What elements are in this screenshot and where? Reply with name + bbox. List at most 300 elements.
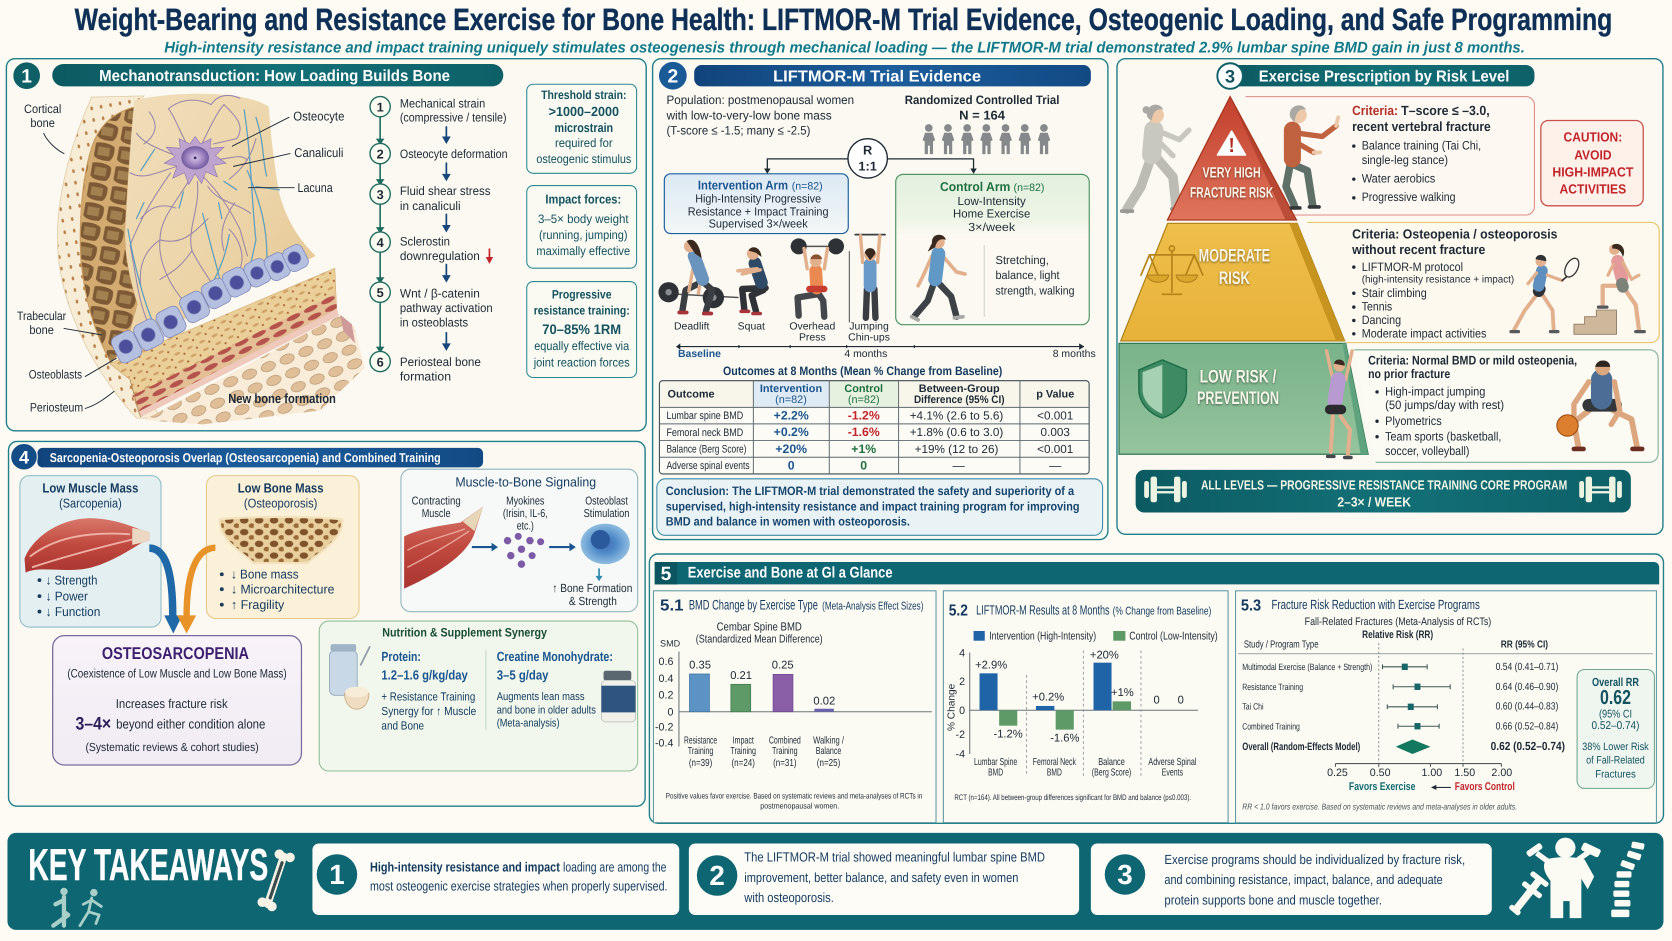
box: low bone mass: ↑ Fragility [231, 597, 284, 612]
chart 5.1: BMD change by exercise type: 0.02 [813, 695, 835, 708]
flow: mechanotransduction steps: Sclerostin [400, 236, 450, 248]
tier: very high risk: VERY HIGH [1203, 163, 1261, 181]
box: nutrition and supplement synergy: (Meta-analysis) [497, 717, 560, 730]
labels: exercises: Overhead [789, 321, 835, 333]
chart 5.2: LIFTMOR-M results: +20% [1090, 649, 1119, 662]
table: outcomes: -1.6% [848, 427, 880, 439]
box: low bone mass: (Osteoporosis) [244, 496, 317, 511]
table: outcomes: -1.2% [848, 410, 880, 423]
box: nutrition and supplement synergy: Protein: [381, 649, 421, 664]
flow: mechanotransduction steps: Fluid shear stress [400, 186, 491, 198]
callout: overall RR: Overall RR [1592, 677, 1639, 689]
table: outcomes: Intervention [760, 383, 822, 395]
box: control arm: strength, walking [996, 285, 1074, 298]
chart 5.3: forest plot: Study / Program Type [1244, 639, 1319, 651]
text: randomized trial: Randomized Controlled Trial [905, 94, 1059, 107]
tier: low risk: LOW RISK / [1200, 367, 1277, 387]
labels: exercises: Squat [738, 321, 765, 333]
flow: mechanotransduction steps: Periosteal bone [400, 356, 481, 369]
card: takeaway 2 [689, 844, 1079, 915]
chart 5.1: BMD change by exercise type: -0.4 [655, 738, 674, 750]
tier: very high risk [1167, 97, 1296, 220]
badge 1: 1 [21, 66, 32, 87]
box: osteosarcopenia: Increases fracture risk [116, 696, 229, 711]
table: outcomes: +1.8% (0.6 to 3.0) [910, 427, 1003, 439]
box: nutrition and supplement synergy: 1.2–1.6 g/kg/day [381, 668, 468, 683]
chart 5.2: LIFTMOR-M results: Balance [1098, 757, 1125, 768]
card: takeaway 3: Exercise programs should be individualized by fracture risk, [1164, 852, 1465, 867]
chart 5.2: LIFTMOR-M results: +2.9% [975, 659, 1007, 672]
chart 5.3: forest plot: Fracture Risk Reduction with Exercise Programs [1271, 597, 1480, 612]
chart 5.1: BMD change by exercise type: 0.4 [659, 673, 674, 685]
icon: spine [1611, 841, 1645, 917]
box: very high criteria: Progressive walking [1362, 191, 1456, 204]
new bone layers [110, 268, 365, 424]
icon: contracting muscle [404, 507, 483, 589]
box: low muscle mass: ↓ Function [46, 604, 100, 619]
chart 5.3: forest plot: 0.64 (0.46–0.90) [1496, 681, 1558, 693]
timeline [676, 343, 1096, 360]
callout: caution: ACTIVITIES [1560, 182, 1626, 197]
box: moderate criteria: Criteria: Osteopenia / osteoporosis [1352, 227, 1558, 242]
chart 5.3: forest plot: 0.60 (0.44–0.83) [1496, 701, 1558, 713]
table: outcomes: +2.2% [774, 410, 809, 423]
arrow: muscle to osteosarcopenia [149, 548, 182, 633]
box: low risk criteria: soccer, volleyball) [1385, 445, 1470, 458]
box: control arm [896, 174, 1089, 325]
flow: mechanotransduction steps: 1 [377, 100, 384, 115]
table: outcomes [659, 365, 1089, 474]
text: population: Population: postmenopausal women [666, 94, 854, 107]
table: outcomes: 0 [860, 460, 867, 473]
banner: all levels: ALL LEVELS — PROGRESSIVE RESISTANCE TRAINING CORE PROGRAM [1201, 478, 1567, 492]
flow: mechanotransduction steps: pathway activation [400, 302, 493, 315]
flow: mechanotransduction steps: 5 [377, 285, 384, 300]
figure: jumping woman [1327, 351, 1352, 457]
panel 4: osteosarcopenia [9, 441, 645, 806]
flow: mechanotransduction steps: 2 [377, 147, 384, 162]
table: outcomes: +20% [775, 443, 807, 456]
chart 5.2: LIFTMOR-M results: Events [1162, 767, 1183, 779]
icon: porous bone [220, 517, 342, 563]
chart 5.3: forest plot: Fall-Related Fractures (Meta-Analysis of RCTs) [1305, 617, 1491, 628]
box: low risk criteria: Criteria: Normal BMD or mild osteopenia, [1368, 353, 1577, 367]
box: very high criteria: single-leg stance) [1362, 154, 1448, 167]
text: population: with low-to-very-low bone mass [665, 110, 832, 123]
figure: deadlift [658, 240, 738, 314]
bone labels: bone [29, 324, 54, 337]
table: outcomes: Balance (Berg Score) [666, 444, 746, 456]
box: control arm: balance, light [996, 269, 1060, 282]
table: outcomes: Femoral neck BMD [666, 427, 743, 439]
callout: caution [1541, 121, 1643, 206]
bone labels: Trabecular [17, 310, 66, 323]
box: osteosarcopenia: (Systematic reviews & cohort studies) [85, 741, 259, 754]
icon: runners [53, 888, 101, 926]
box: nutrition and supplement synergy: + Resistance Training [381, 691, 475, 704]
chart 5.1: BMD change by exercise type: Impact [733, 735, 754, 746]
callout: conclusion: Conclusion: The LIFTMOR-M trial demonstrated the safety and superiority of a [666, 486, 1075, 498]
chart 5.3: forest plot: Tai Chi [1242, 701, 1264, 712]
chart 5.2: LIFTMOR-M results: BMD [988, 767, 1003, 779]
bone labels: Canaliculi [294, 145, 343, 160]
callout: progressive resistance training: 70–85% 1RM [542, 321, 621, 337]
box: moderate criteria: LIFTMOR-M protocol [1362, 261, 1463, 274]
chart 5.1: BMD change by exercise type: 0 [667, 707, 674, 719]
box: muscle-to-bone signaling: Stimulation [584, 508, 629, 520]
figure: overhead press [791, 238, 844, 317]
chart 5.3: forest plot: 1.00 [1421, 768, 1443, 779]
box: control arm: Stretching, [996, 254, 1049, 267]
flow: mechanotransduction steps: in osteoblasts [400, 317, 468, 330]
table: outcomes: 0.003 [1041, 427, 1070, 439]
chart 5.1: BMD change by exercise type: 0.21 [730, 669, 752, 682]
illustration: bone cross-section [44, 94, 365, 424]
chart 5.3: forest plot: Multimodal Exercise (Balance + Strength) [1242, 662, 1372, 672]
banner: all levels [1136, 470, 1631, 513]
banner: all levels: 2–3× / WEEK [1337, 495, 1411, 510]
bars [689, 674, 834, 712]
chart 5.3: forest plot: RR (95% CI) [1501, 639, 1548, 651]
chart 5.1: BMD change by exercise type: Positive values favor exercise. Based on systematic reviews and meta-analyses of RCTs in [666, 791, 922, 801]
bars [980, 663, 1131, 730]
icon: creatine bottle [601, 671, 636, 722]
labels: exercises [674, 321, 890, 344]
labels: exercises: Chin-ups [848, 332, 890, 344]
chart 5.1: BMD change by exercise type: Training [688, 745, 713, 757]
heading: key takeaways: KEY TAKEAWAYS [28, 839, 268, 889]
table: outcomes: — [952, 460, 965, 473]
chart 5.1: BMD change by exercise type: Training [730, 745, 756, 757]
callout: threshold strain: osteogenic stimulus [536, 154, 631, 166]
chart 5.1: BMD change by exercise type: Combined [769, 735, 801, 746]
chart 5.1: BMD change by exercise type: 0.25 [772, 659, 794, 672]
icon: osteoblast cell [581, 524, 630, 564]
tier: moderate risk: MODERATE [1199, 246, 1270, 266]
chart 5.1: BMD change by exercise type: Resistance [684, 735, 717, 746]
timeline: 4 months [844, 349, 887, 360]
bone labels [17, 103, 345, 415]
box: muscle-to-bone signaling: Osteoblast [585, 495, 628, 508]
text: randomized trial: N = 164 [959, 108, 1005, 123]
box: moderate criteria: Stair climbing [1362, 287, 1427, 300]
chart 5.2: LIFTMOR-M results: 0 [1178, 694, 1184, 707]
table: outcomes: Outcomes at 8 Months (Mean % Change from Baseline) [723, 365, 1003, 378]
figure: basketball player [1557, 360, 1642, 449]
chart 5.2: LIFTMOR-M results: +1% [1111, 686, 1134, 699]
bone labels: Periosteum [30, 402, 83, 415]
table: outcomes: (n=82) [848, 395, 880, 406]
table: outcomes: (n=82) [775, 395, 807, 406]
box: low muscle mass [20, 476, 161, 627]
icon: myokines [504, 533, 544, 568]
tier: moderate risk: RISK [1219, 268, 1250, 288]
box: nutrition and supplement synergy: and bone in older adults [497, 704, 596, 717]
box: control arm: (n=82) [1014, 182, 1044, 194]
chart 5.1: BMD change by exercise type: 0.35 [689, 659, 711, 672]
card: takeaway 1: most osteogenic exercise strategies when properly supervised. [370, 879, 668, 894]
chart 5.1: BMD change by exercise type: BMD Change by Exercise Type [689, 597, 818, 613]
box: muscle-to-bone signaling: Muscle [422, 508, 451, 520]
chart 5.1: BMD change by exercise type: postmenopausal women. [760, 801, 839, 811]
bone labels: bone [30, 117, 55, 130]
card: takeaway 1: loading are among the [563, 860, 666, 874]
box: nutrition and supplement synergy: Nutrition & Supplement Synergy [382, 627, 548, 640]
bone labels: New bone formation [228, 391, 336, 406]
flow: mechanotransduction steps: 6 [377, 355, 384, 370]
box: low muscle mass: ↓ Strength [46, 573, 97, 588]
callout: threshold strain: required for [555, 138, 613, 150]
heading: exercise and bone: 5 [661, 563, 671, 584]
pointer lines [44, 117, 294, 408]
bone labels: Cortical [24, 103, 61, 116]
chart 5.3: forest plot: Favors Control [1455, 781, 1515, 793]
box: intervention arm: Intervention Arm [698, 178, 788, 192]
chart 5.1: BMD change by exercise type: (Meta-Analysis Effect Sizes) [822, 600, 923, 613]
heading: exercise prescription: 3 [1225, 67, 1235, 87]
box: muscle-to-bone signaling: Myokines [506, 495, 545, 508]
card: takeaway 1: 1 [329, 858, 345, 890]
box: low risk criteria [1354, 350, 1658, 462]
table: outcomes: <0.001 [1037, 410, 1073, 423]
chart 5.3: forest plot: 5.3 [1241, 597, 1261, 615]
box: low bone mass [206, 476, 359, 619]
box: nutrition and supplement synergy: 3–5 g/day [497, 668, 549, 683]
box: very high criteria: recent vertebral fracture [1352, 119, 1491, 134]
heading: exercise prescription: Exercise Prescription by Risk Level [1259, 68, 1509, 86]
box: very high criteria: Water aerobics [1362, 173, 1436, 186]
chart 5.1: BMD change by exercise type: (n=31) [773, 757, 797, 769]
box: moderate criteria: Dancing [1362, 314, 1401, 327]
icon: bone [258, 849, 295, 911]
card: takeaway 1: High-intensity resistance and impact [370, 860, 561, 874]
box: nutrition and supplement synergy: Augments lean mass [497, 690, 585, 703]
box: low bone mass: ↓ Bone mass [231, 567, 299, 582]
chart 5.2: LIFTMOR-M results: % Change [946, 684, 958, 731]
callout: progressive resistance training: resistance training: [534, 305, 630, 318]
callout: progressive resistance training: joint reaction forces [533, 357, 630, 370]
timeline: Baseline [678, 349, 722, 360]
box: low risk criteria: High-impact jumping [1385, 386, 1485, 399]
box: low bone mass: ↓ Microarchitecture [231, 582, 335, 597]
box: nutrition and supplement synergy: and Bone [381, 720, 424, 733]
card: takeaway 1 [312, 844, 679, 915]
chart 5.2: LIFTMOR-M results: LIFTMOR-M Results at 8 Months [976, 603, 1110, 617]
callout: progressive resistance training: equally effective via [534, 340, 630, 353]
box: intervention arm: (n=82) [792, 181, 823, 192]
panel 2: LIFTMOR-M trial evidence [653, 59, 1108, 540]
box: moderate criteria: Tennis [1362, 301, 1392, 314]
table: outcomes: Adverse spinal events [666, 461, 750, 472]
heading: sarcopenia overlap: Sarcopenia-Osteoporosis Overlap (Osteosarcopenia) and Combined Training [50, 450, 441, 465]
pyramid [1119, 97, 1368, 454]
box: osteosarcopenia: OSTEOSARCOPENIA [102, 645, 249, 663]
callout: impact forces [527, 186, 637, 268]
flow: mechanotransduction steps: (compressive / tensile) [400, 112, 507, 125]
chart 5.2: LIFTMOR-M results: RCT (n=164). All between-group differences significant for BMD and balance (p≤0.003). [954, 792, 1191, 802]
flow: mechanotransduction steps: formation [400, 371, 451, 384]
osteoblast cells [109, 242, 311, 365]
labels: exercises: Deadlift [674, 321, 710, 333]
badge 2: 2 [668, 66, 678, 87]
box: nutrition and supplement synergy [319, 621, 638, 771]
box: control arm: Control Arm [940, 179, 1010, 194]
chart 5.1: BMD change by exercise type: Balance [816, 745, 841, 757]
flow: mechanotransduction steps [370, 97, 508, 384]
text: population: (T-score ≤ -1.5; many ≤ -2.5) [666, 125, 811, 138]
box: osteosarcopenia: beyond either condition alone [116, 717, 265, 732]
callout: overall RR: 38% Lower Risk [1582, 742, 1650, 753]
box: low risk criteria: Plyometrics [1385, 415, 1442, 428]
callout: conclusion: BMD and balance in women with osteoporosis. [666, 516, 910, 529]
box: osteosarcopenia: (Coexistence of Low Muscle and Low Bone Mass) [67, 668, 287, 681]
flow: mechanotransduction steps: 4 [377, 235, 384, 250]
heading: mechanotransduction [52, 64, 503, 86]
heading: mechanotransduction: Mechanotransduction: How Loading Builds Bone [99, 67, 450, 85]
figure: stair stepping [1574, 244, 1644, 334]
panel 1: mechanotransduction [6, 59, 646, 431]
chart 5.3: forest plot: 0.50 [1370, 768, 1391, 779]
box: low risk criteria: no prior fracture [1368, 367, 1451, 381]
box: nutrition and supplement synergy: Creatine Monohydrate: [497, 649, 613, 664]
table: outcomes: +4.1% (2.6 to 5.6) [910, 410, 1003, 423]
box: very high criteria: T–score ≤ –3.0, [1401, 103, 1490, 118]
box: nutrition and supplement synergy: Synergy for ↑ Muscle [381, 705, 476, 718]
callout: conclusion: supervised, high-intensity resistance and impact training program for improving [666, 501, 1079, 514]
chart 5.2: LIFTMOR-M results: Femoral Neck [1033, 757, 1076, 768]
figure: squat [738, 247, 766, 314]
icon: figure with dumbbells [1508, 838, 1601, 918]
chart 5.2: LIFTMOR-M results: 2 [959, 677, 965, 688]
chart 5.1: BMD change by exercise type: Walking / [813, 735, 844, 746]
heading: exercise prescription [1217, 63, 1534, 89]
figure: tennis player [1511, 255, 1582, 332]
box: osteosarcopenia: 3–4× [75, 713, 111, 734]
chart 5.1: BMD change by exercise type: (Standardized Mean Difference) [696, 633, 823, 646]
chart 5.3: forest plot: 0.66 (0.52–0.84) [1496, 721, 1558, 733]
box: moderate criteria: Moderate impact activities [1362, 328, 1487, 341]
bone labels: Lacuna [298, 180, 333, 195]
card: takeaway 2: improvement, better balance, and safety even in women [744, 870, 1018, 885]
box: muscle-to-bone signaling: & Strength [569, 595, 617, 608]
chart 5.2: LIFTMOR-M results [943, 591, 1228, 823]
box: low muscle mass: Low Muscle Mass [42, 481, 138, 496]
flow: mechanotransduction steps: Osteocyte deformation [400, 148, 508, 161]
figure: squatting older woman [1286, 105, 1338, 208]
table: outcomes: Outcome [668, 389, 715, 401]
chart 5.3: forest plot: Relative Risk (RR) [1362, 630, 1433, 641]
chart 5.1: BMD change by exercise type [653, 591, 936, 823]
chart 5.2: LIFTMOR-M results: +0.2% [1032, 691, 1064, 704]
chart 5.2: LIFTMOR-M results: 5.2 [949, 601, 968, 620]
box: muscle-to-bone signaling: (Irisin, IL-6, [503, 508, 548, 520]
chart 5.3: forest plot: 0.62 (0.52–0.74) [1491, 741, 1565, 753]
table: outcomes: <0.001 [1037, 443, 1073, 456]
badge 1 [13, 62, 40, 89]
chart 5.3: forest plot: RR < 1.0 favors exercise. Based on systematic reviews and meta-analyses in older adults. [1242, 802, 1517, 812]
callout: overall RR [1577, 669, 1654, 788]
legend [974, 630, 1218, 643]
card: takeaway 3: and combining resistance, impact, balance, and adequate [1164, 872, 1443, 887]
tier: very high risk: FRACTURE RISK [1190, 183, 1273, 200]
subtitle: High-intensity resistance and impact training uniquely stimulates osteogenesis through mechanical loading — the LIFTMOR-M trial demonstrated 2.9% lumbar spine BMD gain in just 8 months. [164, 39, 1525, 57]
table: outcomes: +0.2% [774, 427, 809, 439]
tier: low risk: PREVENTION [1197, 388, 1279, 408]
table: outcomes: +1% [851, 443, 876, 456]
box: low risk criteria: (50 jumps/day with rest) [1385, 399, 1504, 412]
arrow: osteoblast to bone formation [596, 568, 603, 581]
table: outcomes: +19% (12 to 26) [915, 443, 998, 456]
panel 3: exercise prescription [1117, 59, 1663, 534]
chart 5.3: forest plot [1236, 591, 1656, 823]
box: moderate criteria [1307, 222, 1659, 343]
icon: dumbbell right [1579, 477, 1622, 502]
chart 5.2: LIFTMOR-M results: 0 [959, 705, 965, 717]
chart 5.3: forest plot: Resistance Training [1242, 681, 1303, 692]
box: intervention arm [664, 174, 848, 234]
heading: exercise and bone: Exercise and Bone at Gl a Glance [688, 565, 893, 582]
tier: moderate risk [1121, 223, 1345, 341]
box: intervention arm: Supervised 3×/week [709, 218, 808, 231]
box: intervention arm: High-Intensity Progressive [695, 193, 821, 206]
box: intervention arm: Resistance + Impact Training [688, 206, 829, 219]
text: population [665, 94, 854, 138]
card: takeaway 2: 2 [709, 860, 725, 892]
chart 5.2: LIFTMOR-M results: -1.2% [993, 728, 1023, 741]
box: very high criteria [1245, 97, 1534, 215]
timeline: 8 months [1053, 349, 1096, 360]
labels: exercises: Jumping [849, 321, 889, 333]
callout: conclusion [657, 479, 1103, 535]
callout: threshold strain: >1000–2000 [549, 105, 619, 119]
bone labels: Osteocyte [293, 109, 345, 124]
legend: Control (Low-Intensity) [1129, 630, 1218, 643]
flow: mechanotransduction steps: Mechanical strain [400, 98, 485, 111]
box: low muscle mass: (Sarcopenia) [59, 496, 122, 511]
icon: dumbbell left [1144, 477, 1187, 502]
callout: impact forces: Impact forces: [545, 192, 621, 207]
heading: trial evidence [694, 65, 1091, 86]
chart 5.3: forest plot: Favors Exercise [1349, 781, 1416, 793]
chart 5.3: forest plot: 1.50 [1454, 768, 1476, 779]
chart 5.2: LIFTMOR-M results: 0 [1154, 694, 1160, 707]
card: takeaway 3: 3 [1117, 858, 1133, 890]
box: control arm: Low-Intensity [958, 195, 1026, 208]
flow: mechanotransduction steps: in canaliculi [400, 200, 461, 213]
chart 5.1: BMD change by exercise type: 0.6 [659, 656, 674, 668]
randomization node and arrows [764, 139, 977, 178]
chart 5.2: LIFTMOR-M results: Adverse Spinal [1148, 757, 1196, 768]
callout: impact forces: (running, jumping) [539, 229, 628, 242]
callout: caution: HIGH-IMPACT [1552, 165, 1634, 180]
figure: tai chi woman [1122, 105, 1189, 211]
chart 5.1: BMD change by exercise type: 0.2 [659, 690, 674, 702]
callout: threshold strain [527, 84, 637, 173]
arrow: bone to osteosarcopenia [177, 548, 215, 633]
table: outcomes: 0 [788, 460, 795, 473]
chart 5.2: LIFTMOR-M results: Lumbar Spine [974, 757, 1017, 768]
callout: progressive resistance training: Progressive [552, 289, 612, 302]
forest markers [1382, 664, 1450, 754]
table: outcomes: Lumbar spine BMD [666, 411, 743, 422]
randomization node and arrows: R [863, 143, 873, 158]
callout: threshold strain: microstrain [554, 121, 613, 135]
box: control arm: 3×/week [968, 221, 1016, 234]
table: outcomes: Difference (95% CI) [914, 395, 1005, 406]
chart 5.2: LIFTMOR-M results: -1.6% [1050, 732, 1079, 745]
randomization node and arrows: 1:1 [858, 159, 877, 174]
chart 5.1: BMD change by exercise type: -0.2 [655, 722, 674, 734]
